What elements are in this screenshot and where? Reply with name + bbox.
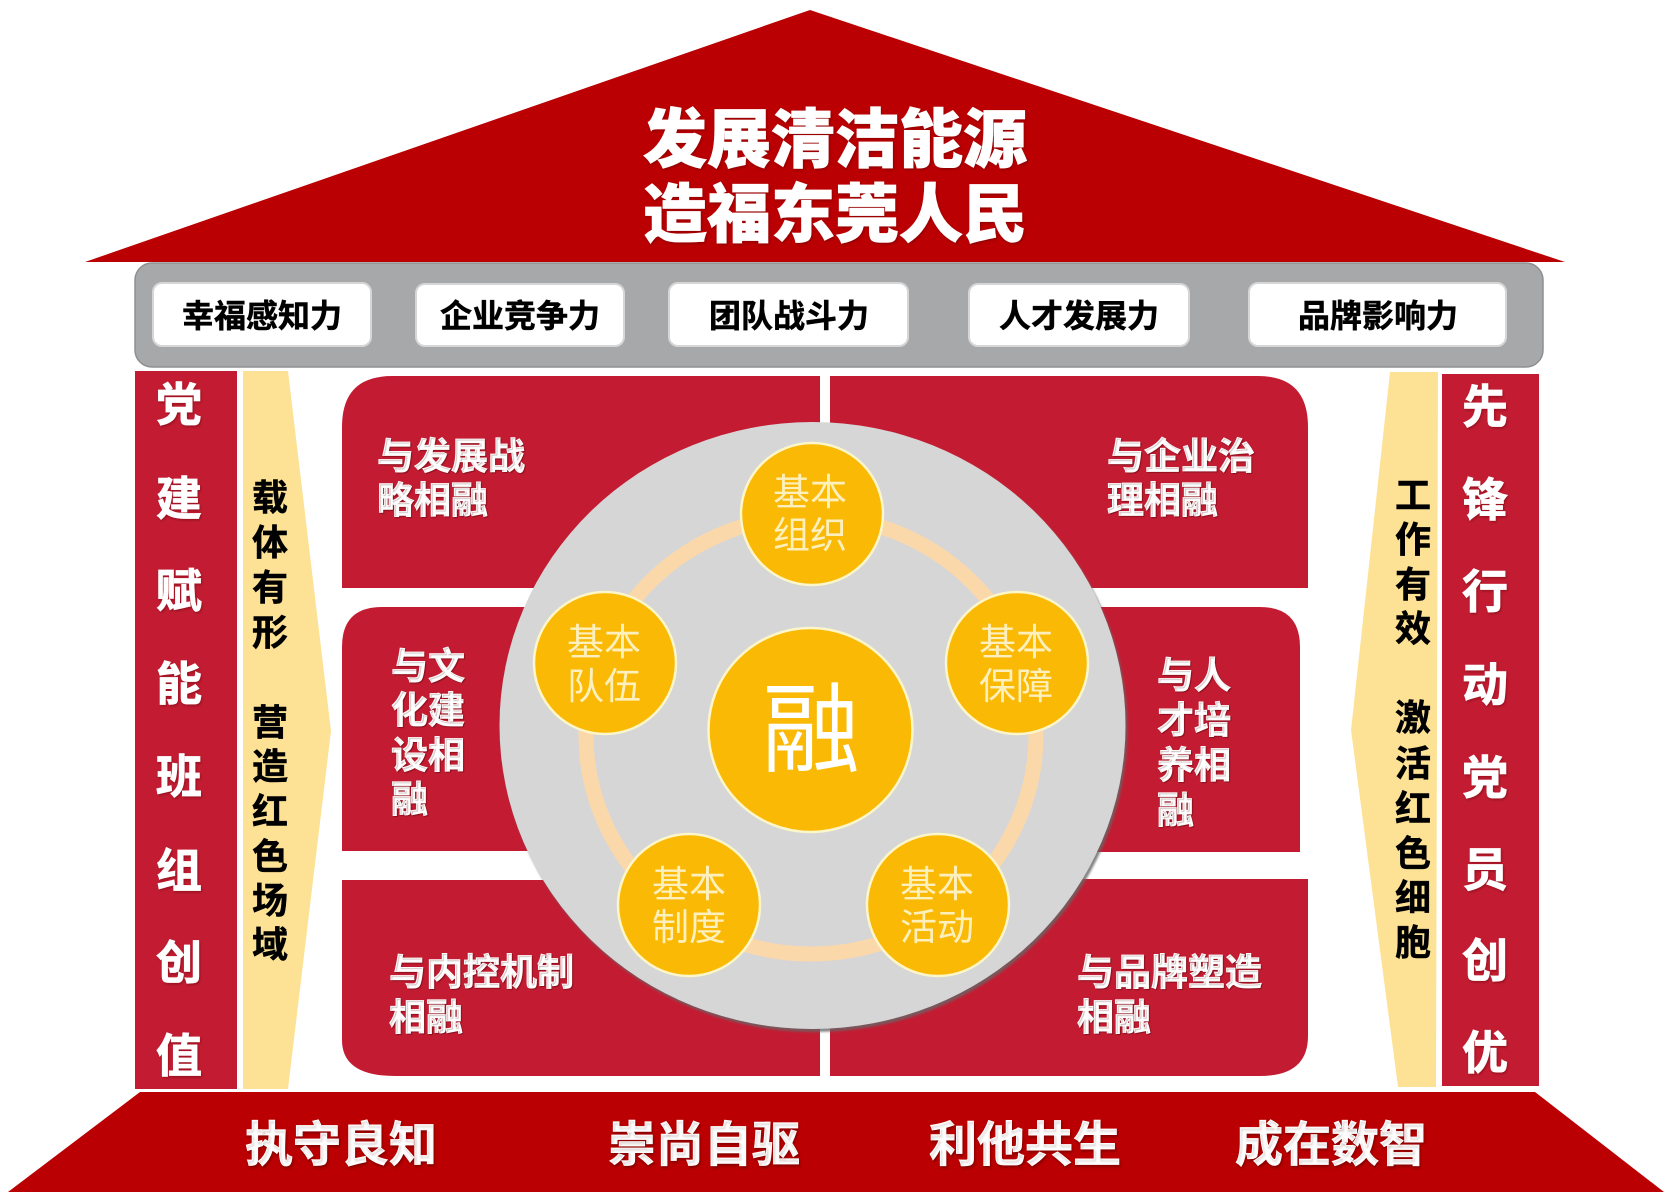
left arrow: 载体有形 营造红色场域: 场 xyxy=(252,880,288,921)
node: 基本队伍 xyxy=(534,592,676,734)
panel: 与企业治理相融: 与企业治 xyxy=(1107,436,1255,477)
right arrow: 工作有效 激活红色细胞: 胞 xyxy=(1395,922,1431,963)
left pillar: 党建赋能班组创值 xyxy=(135,371,237,1089)
left pillar: 党建赋能班组创值: 值 xyxy=(156,1030,202,1082)
box: 幸福感知力 xyxy=(153,283,371,346)
panel: 与发展战略相融: 与发展战 xyxy=(377,436,525,477)
box: 团队战斗力 xyxy=(669,283,908,346)
panel: 与人才培养相融: 才培 xyxy=(1157,700,1231,741)
node: 基本保障: 基本 xyxy=(979,622,1053,663)
node: 基本队伍: 队伍 xyxy=(567,666,641,707)
panel: 与文化建设相融: 设相 xyxy=(391,735,465,776)
right pillar: 先锋行动党员创优: 行 xyxy=(1462,566,1508,618)
box: 幸福感知力: 幸福感知力 xyxy=(182,298,342,334)
base text: 利他共生: 利他共生 xyxy=(929,1119,1121,1172)
right arrow: 工作有效 激活红色细胞: 作 xyxy=(1395,519,1431,560)
node: 基本制度: 基本 xyxy=(652,864,726,905)
panel: 与人才培养相融: 养相 xyxy=(1157,745,1231,786)
right pillar: 先锋行动党员创优: 锋 xyxy=(1462,474,1508,526)
left pillar: 党建赋能班组创值: 创 xyxy=(156,937,202,989)
panel: 与人才培养相融: 与人 xyxy=(1157,655,1231,696)
right pillar: 先锋行动党员创优: 创 xyxy=(1462,935,1508,987)
node: 基本队伍: 基本 xyxy=(567,622,641,663)
panel: 与人才培养相融 xyxy=(1000,607,1300,852)
panel: 与内控机制相融: 与内控机制 xyxy=(389,952,574,993)
left pillar: 党建赋能班组创值: 班 xyxy=(156,751,202,803)
beam: five forces xyxy=(135,263,1543,367)
left arrow: 载体有形 营造红色场域: 形 xyxy=(252,612,288,653)
right arrow: 工作有效 激活红色细胞: 活 xyxy=(1395,743,1431,784)
base xyxy=(8,1092,1664,1192)
right pillar: 先锋行动党员创优: 动 xyxy=(1462,659,1508,711)
panel: 与企业治理相融 xyxy=(830,376,1308,588)
panel: 与文化建设相融: 化建 xyxy=(391,690,465,731)
base text: 成在数智: 成在数智 xyxy=(1235,1119,1427,1172)
box: 人才发展力 xyxy=(969,284,1189,346)
node: 融: 融 xyxy=(762,675,860,785)
right arrow: 工作有效 激活红色细胞: 效 xyxy=(1395,608,1431,649)
box: 企业竞争力: 企业竞争力 xyxy=(440,298,600,334)
right arrow: 工作有效 激活红色细胞: 激 xyxy=(1395,697,1431,738)
right pillar: 先锋行动党员创优: 优 xyxy=(1462,1027,1508,1079)
node: 基本保障: 保障 xyxy=(979,666,1053,707)
left arrow: 载体有形 营造红色场域: 红 xyxy=(252,791,288,832)
left arrow: 载体有形 营造红色场域: 载 xyxy=(252,477,288,518)
ring xyxy=(586,516,1036,954)
title: 发展清洁能源 xyxy=(643,104,1027,176)
right arrow: 工作有效 激活红色细胞: 红 xyxy=(1395,788,1431,829)
panel: 与内控机制相融 xyxy=(342,880,820,1076)
left arrow: 载体有形 营造红色场域: 色 xyxy=(252,836,288,877)
panel: 与企业治理相融: 理相融 xyxy=(1107,480,1218,521)
right arrow: 工作有效 激活红色细胞: 细 xyxy=(1395,877,1431,918)
right arrow: 工作有效 激活红色细胞: 工 xyxy=(1395,475,1431,516)
panel: 与内控机制相融: 相融 xyxy=(389,997,463,1038)
box: 品牌影响力 xyxy=(1249,283,1506,346)
node: 基本活动 xyxy=(867,834,1009,976)
left pillar: 党建赋能班组创值: 能 xyxy=(156,658,202,710)
panel: 与文化建设相融 xyxy=(342,607,620,851)
node: 基本组织 xyxy=(741,443,883,585)
left pillar: 党建赋能班组创值: 赋 xyxy=(156,565,202,617)
panel: 与文化建设相融: 融 xyxy=(391,779,428,820)
roof xyxy=(85,10,1565,262)
right pillar: 先锋行动党员创优 xyxy=(1442,374,1539,1086)
panel: 与发展战略相融 xyxy=(342,376,820,588)
left pillar: 党建赋能班组创值: 党 xyxy=(156,379,202,431)
panel: 与发展战略相融: 略相融 xyxy=(377,480,488,521)
left arrow: 载体有形 营造红色场域: 有 xyxy=(252,567,288,608)
panel: 与品牌塑造相融: 与品牌塑造 xyxy=(1077,952,1262,993)
left pillar: 党建赋能班组创值: 建 xyxy=(156,473,202,525)
left pillar: 党建赋能班组创值: 组 xyxy=(156,845,202,897)
title xyxy=(643,104,1027,251)
right pillar: 先锋行动党员创优: 员 xyxy=(1462,844,1508,896)
node: 基本制度: 制度 xyxy=(652,907,726,948)
left arrow: 载体有形 营造红色场域: 体 xyxy=(252,522,288,563)
panel: 与文化建设相融: 与文 xyxy=(391,646,465,687)
box: 企业竞争力 xyxy=(416,284,624,346)
node: 融 xyxy=(708,628,912,832)
box: 团队战斗力: 团队战斗力 xyxy=(709,298,869,334)
right arrow: 工作有效 激活红色细胞: 色 xyxy=(1395,833,1431,874)
right pillar: 先锋行动党员创优: 先 xyxy=(1462,381,1508,433)
right arrow: 工作有效 激活红色细胞: 有 xyxy=(1395,564,1431,605)
panel: 与人才培养相融: 融 xyxy=(1157,790,1194,831)
base text: 执守良知: 执守良知 xyxy=(245,1119,437,1172)
panel: 与品牌塑造相融 xyxy=(830,879,1308,1076)
panel: 与品牌塑造相融: 相融 xyxy=(1077,997,1151,1038)
base text: 崇尚自驱: 崇尚自驱 xyxy=(608,1119,800,1172)
left arrow: 载体有形 营造红色场域 xyxy=(243,371,331,1089)
node: 基本活动: 活动 xyxy=(900,907,974,948)
left arrow: 载体有形 营造红色场域: 营 xyxy=(252,702,288,743)
node: 基本制度 xyxy=(618,834,760,976)
box: 品牌影响力: 品牌影响力 xyxy=(1298,298,1458,334)
title: 造福东莞人民 xyxy=(643,179,1027,251)
right arrow: 工作有效 激活红色细胞 xyxy=(1351,372,1438,1087)
left arrow: 载体有形 营造红色场域: 造 xyxy=(252,746,288,787)
node: 基本活动: 基本 xyxy=(900,864,974,905)
node: 基本组织: 基本 xyxy=(773,472,847,513)
left arrow: 载体有形 营造红色场域: 域 xyxy=(252,924,288,965)
right pillar: 先锋行动党员创优: 党 xyxy=(1462,752,1508,804)
node: 基本保障 xyxy=(946,592,1088,734)
central disc xyxy=(500,422,1126,1029)
node: 基本组织: 组织 xyxy=(773,515,847,556)
box: 人才发展力: 人才发展力 xyxy=(999,298,1159,334)
